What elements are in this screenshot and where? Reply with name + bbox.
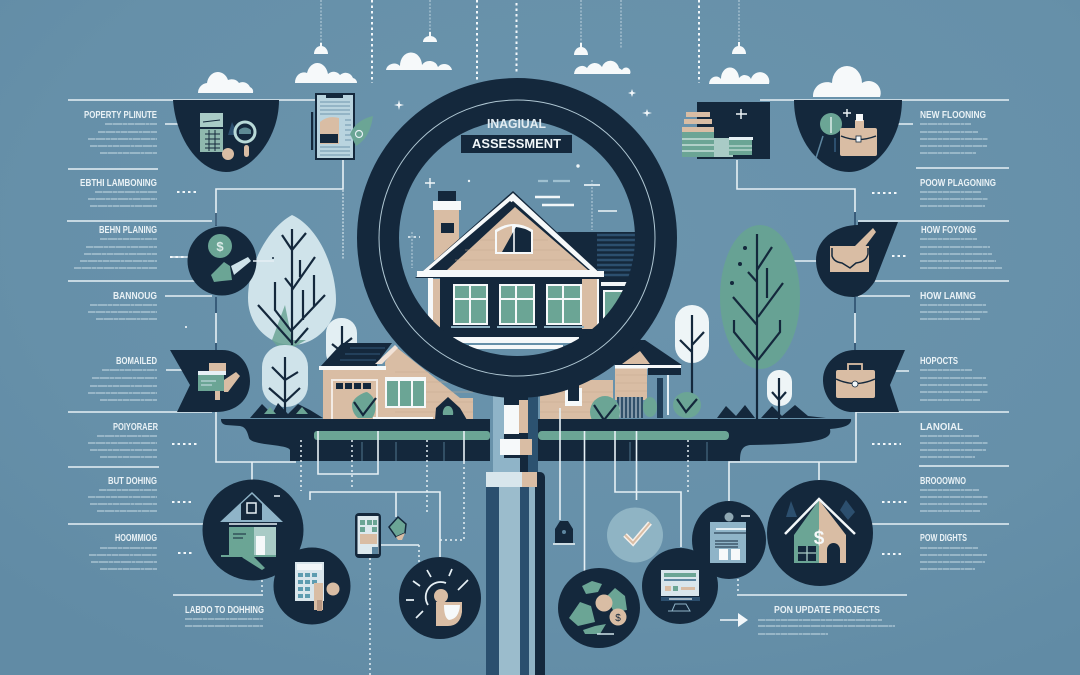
label: brooowno <box>920 475 988 511</box>
top hanging lamps and dotted lines <box>314 0 746 83</box>
label: lead to bonding <box>185 604 264 626</box>
chimney <box>433 191 461 260</box>
label: new flooring <box>920 109 988 153</box>
label: brooowno: BROOOWNO <box>920 475 966 487</box>
green tree right <box>720 225 800 420</box>
left column labels <box>67 100 315 626</box>
icon: money stack box <box>682 102 770 159</box>
icon: planning circle <box>188 226 274 296</box>
icon: monitor circle <box>642 548 718 624</box>
label: new flooring: NEW FLOONING <box>920 109 986 121</box>
icon: phone <box>355 513 381 558</box>
icon: right satchel shape <box>816 222 898 297</box>
icon: clipboard <box>311 93 373 160</box>
icon: planning circle: $ <box>216 239 224 254</box>
right wing roof and trim <box>615 340 682 365</box>
icon: check badge <box>607 508 663 562</box>
label: upgrade projects <box>758 604 895 634</box>
label: banhoug: BANNOUG <box>113 290 157 302</box>
label: hoomning: HOOMMIOG <box>115 532 157 544</box>
right roof <box>557 232 635 280</box>
right leader lines <box>858 124 913 554</box>
label: pow dights: POW DIGHTS <box>920 532 967 544</box>
magnifier lens scene <box>378 99 656 377</box>
upper storey wall <box>428 278 626 338</box>
icon: top right briefcase semicircle <box>794 100 902 172</box>
icon: jar <box>553 521 575 544</box>
lower house <box>319 340 701 430</box>
magnifier ring <box>378 99 656 377</box>
icon: top left research semicircle <box>173 100 279 172</box>
gable roof <box>415 191 606 278</box>
thin ring line <box>379 100 655 376</box>
label: how lamng <box>920 290 988 319</box>
connectors crossing the platform <box>301 408 688 573</box>
label: hopocts: HOPOCTS <box>920 355 958 367</box>
label: but doning: BUT DOHING <box>108 475 157 487</box>
label: poow plagoning: POOW PLAGONING <box>920 177 996 189</box>
ground platform <box>221 419 851 461</box>
left wing roof <box>320 343 392 367</box>
green stripe <box>314 431 729 440</box>
label: planning <box>74 224 157 268</box>
label: how foyong: HOW FOYONG <box>921 224 976 236</box>
big pale tree <box>248 215 336 347</box>
small white trees right <box>675 305 792 420</box>
connector lines <box>216 160 856 675</box>
arrow <box>720 613 748 627</box>
lens windows <box>451 284 584 327</box>
icon: document circle <box>692 501 766 579</box>
label: but doning <box>88 475 157 511</box>
label: how lamng: HOW LAMNG <box>920 290 976 302</box>
label: bomailed: BOMAILED <box>116 355 157 367</box>
label: property <box>84 109 157 153</box>
label: upgrade projects: PON UPDATE PROJECTS <box>774 604 880 616</box>
small pale tree <box>262 345 308 418</box>
icon: coins and leaves circle <box>558 568 640 648</box>
label: property: POPERTY PLINUTE <box>84 109 157 121</box>
icon: idea bulb circle <box>399 557 481 639</box>
steps <box>373 417 433 430</box>
left leader lines <box>165 124 212 553</box>
label: banhoug <box>88 290 157 319</box>
magnifier handle <box>486 396 545 675</box>
icon: coins and leaves circle: $ <box>615 613 621 624</box>
icon: dollar house circle: $ <box>814 528 825 549</box>
label: lead to bonding: LABDO TO DOHHING <box>185 604 264 616</box>
label: poow plagoning <box>920 177 996 206</box>
title line one: INAGIUAL <box>487 117 546 131</box>
label: landing: EBTHI LAMBONING <box>80 177 157 189</box>
sparkles <box>394 89 652 117</box>
right column labels <box>737 100 1009 634</box>
icon: house circle <box>202 480 304 580</box>
icon: right briefcase flag <box>823 350 905 412</box>
attic window <box>495 224 533 254</box>
shrubs <box>352 392 376 418</box>
label: hopocts <box>920 355 988 400</box>
label: lanoial <box>920 421 988 457</box>
label: how foyong <box>920 224 1002 268</box>
label: hoomning <box>89 532 157 569</box>
icon: bomailed flag <box>170 350 250 412</box>
label: poiyoraer <box>88 421 158 457</box>
garage door <box>331 379 378 419</box>
icon: leaf tag <box>389 517 406 540</box>
bushes row <box>250 403 826 418</box>
neck <box>493 396 538 472</box>
title plate <box>461 117 572 153</box>
icon: calculator circle <box>274 548 350 624</box>
lens sky details <box>408 164 617 268</box>
label: poiyoraer: POIYORAER <box>113 421 158 433</box>
porch bands <box>453 337 579 349</box>
label: landing <box>80 177 157 206</box>
label: lanoial: LANOIAL <box>920 421 964 433</box>
title line two: ASSESSMENT <box>472 136 561 151</box>
label: planning: BEHN PLANING <box>99 224 157 236</box>
label: bomailed <box>88 355 157 400</box>
lower window <box>385 377 426 408</box>
clouds <box>198 52 881 97</box>
icon: dollar house circle <box>767 480 873 586</box>
small white tree behind roof <box>326 318 357 368</box>
label: pow dights <box>920 532 987 569</box>
grip <box>486 472 545 675</box>
